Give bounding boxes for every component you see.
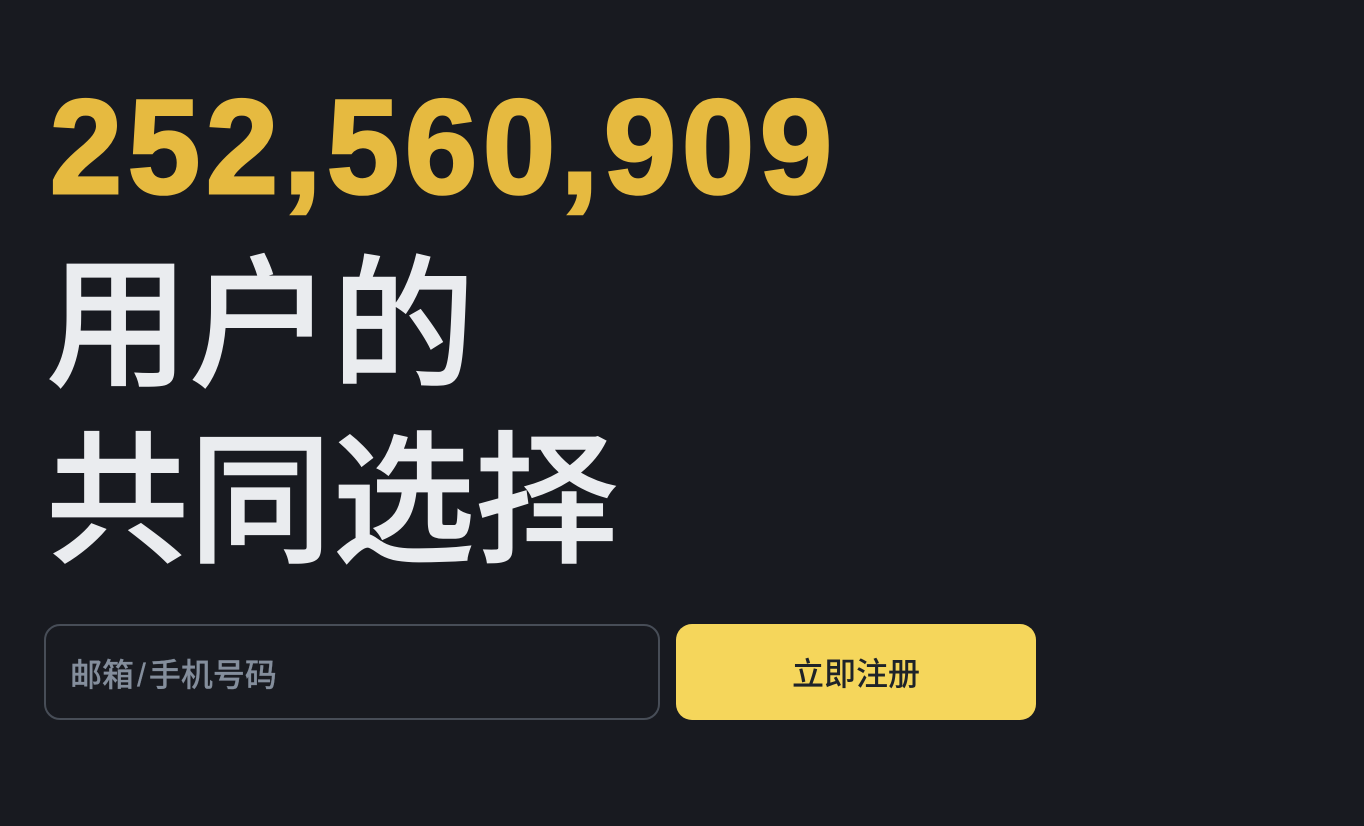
- headline number: 5: [128, 73, 200, 222]
- headline number: 9: [760, 73, 832, 222]
- sign up button: [676, 624, 1036, 720]
- headline number: 2: [50, 73, 122, 222]
- heading line 2: 共同选择: [46, 386, 618, 593]
- sign up button: 立即注册: [792, 649, 920, 695]
- headline number: 9: [604, 73, 676, 222]
- email or phone input: [44, 624, 660, 720]
- headline number: 5: [327, 73, 399, 222]
- headline number: ,: [560, 73, 599, 222]
- heading line 1: 用户的: [46, 210, 475, 417]
- headline number: ,: [283, 73, 322, 222]
- input placeholder: 邮箱/手机号码: [70, 650, 277, 696]
- headline number: 6: [405, 73, 477, 222]
- headline number: 2: [206, 73, 278, 222]
- headline number: 0: [682, 73, 754, 222]
- headline number: 0: [483, 73, 555, 222]
- headline number: [50, 73, 832, 222]
